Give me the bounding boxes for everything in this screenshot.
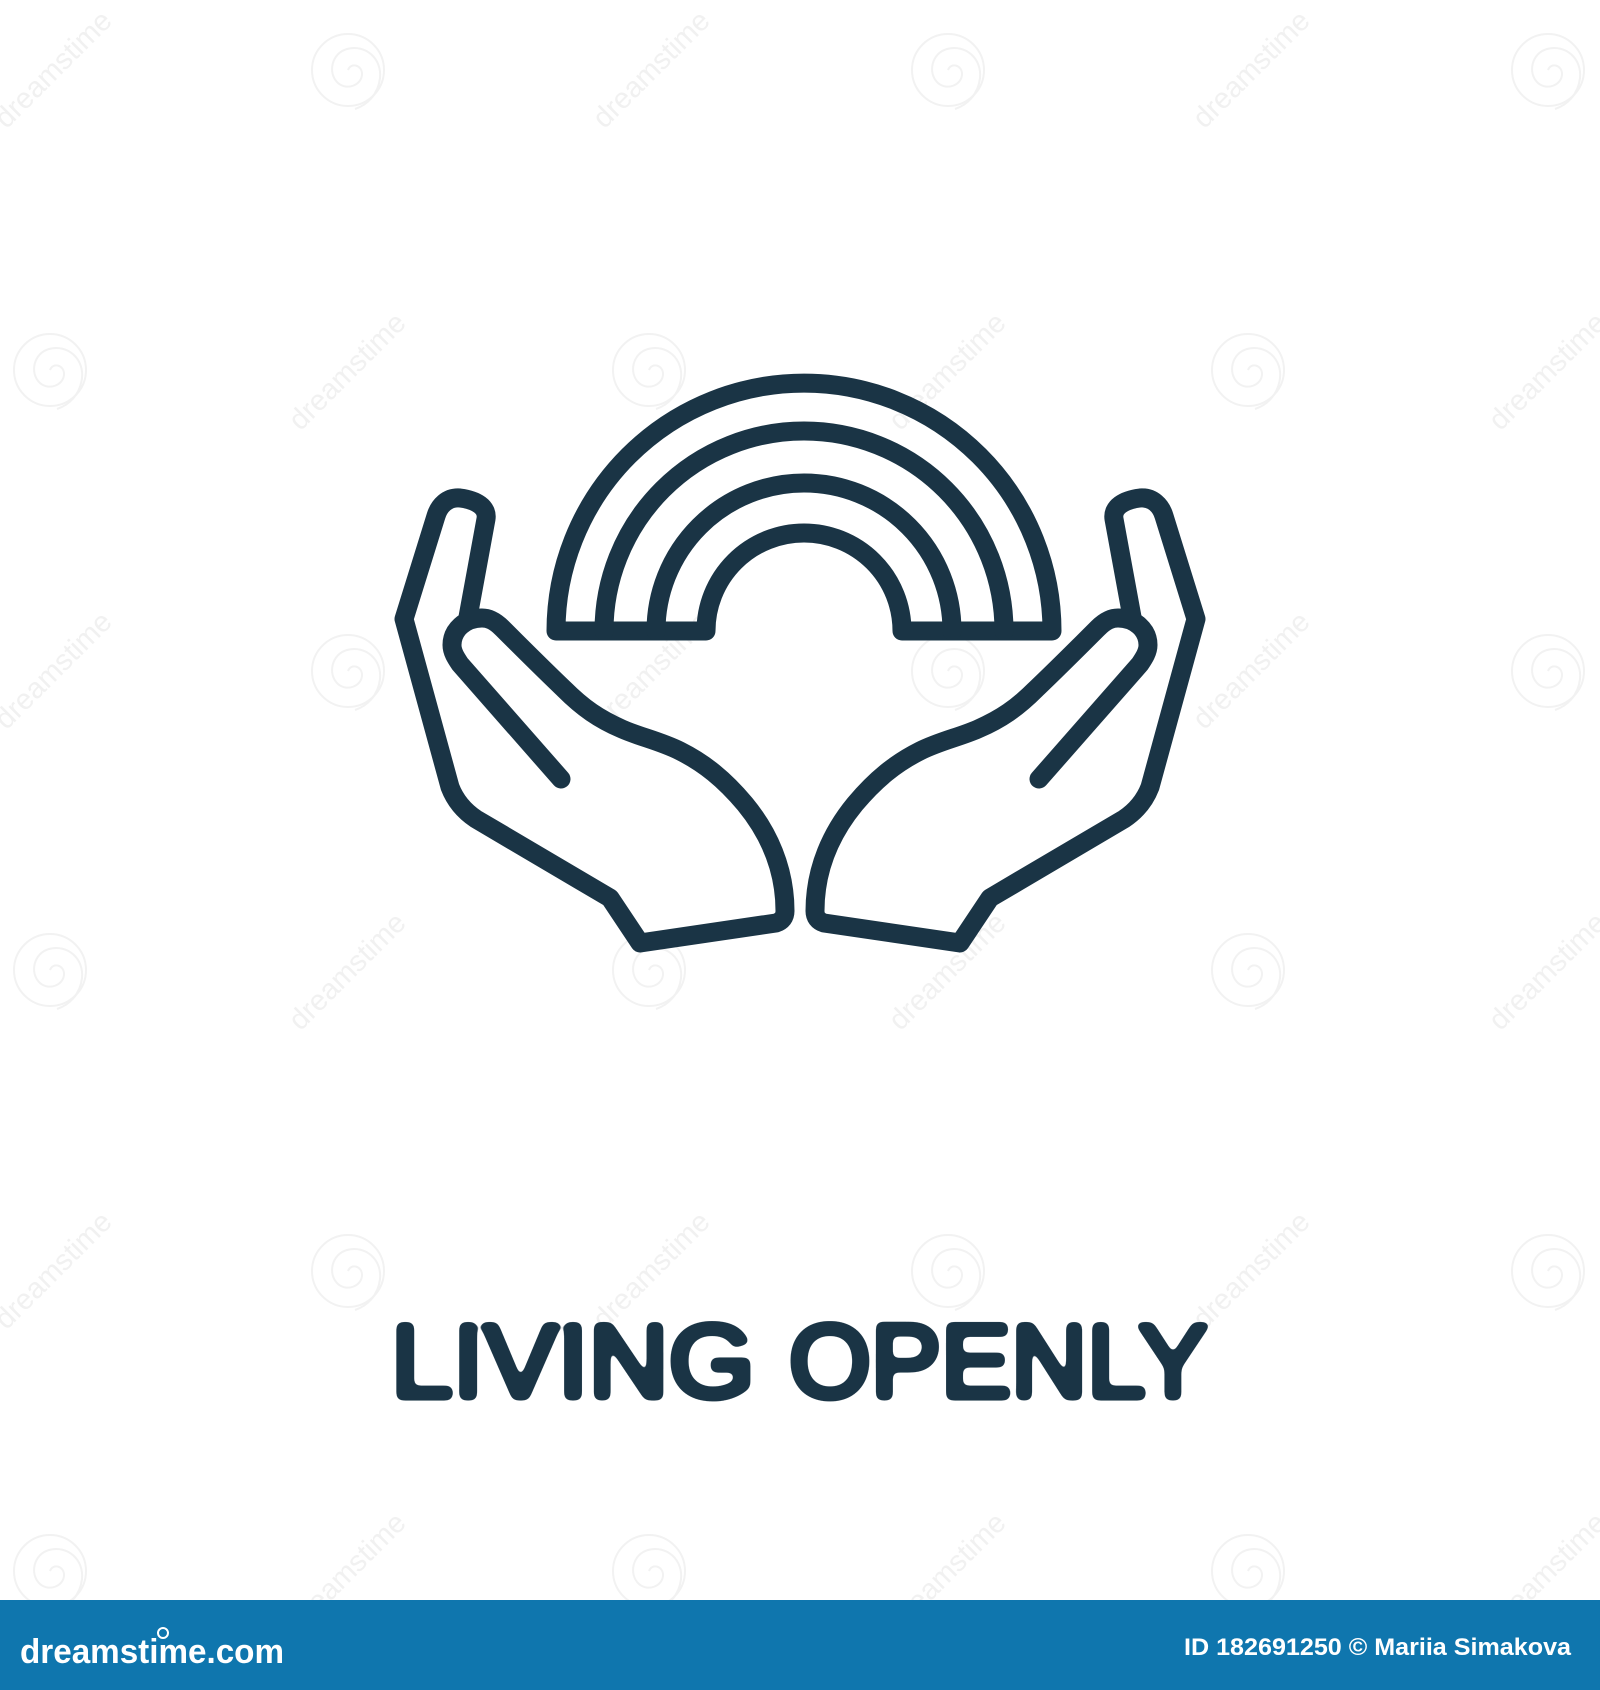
footer logo: dreamstime.com — [20, 1633, 284, 1671]
footer credit: ID 182691250 © Mariia Simakova — [1184, 1634, 1572, 1661]
watermark pattern: dreamstime — [883, 907, 1013, 1037]
icon: rainbow held by two hands — [404, 383, 1196, 943]
icon: left hand — [404, 498, 785, 943]
watermark pattern: dreamstime — [1187, 606, 1317, 736]
watermark pattern: dreamstime — [883, 307, 1013, 437]
watermark pattern: dreamstime — [1187, 5, 1317, 135]
watermark pattern: dreamstime — [283, 1507, 413, 1637]
watermark pattern: dreamstime — [587, 5, 717, 135]
title: OPENLY — [789, 1304, 1208, 1420]
watermark pattern: dreamstime — [283, 907, 413, 1037]
watermark pattern: dreamstime — [1187, 1206, 1317, 1336]
watermark pattern: dreamstime — [883, 1507, 1013, 1637]
icon: rainbow — [556, 383, 1052, 631]
watermark pattern: dreamstime — [587, 606, 717, 736]
watermark pattern: dreamstime — [587, 1206, 717, 1336]
footer band — [0, 1600, 1600, 1690]
title — [391, 1304, 1208, 1420]
watermark pattern: dreamstime — [283, 307, 413, 437]
title: LIVING — [391, 1304, 755, 1420]
icon: right hand — [815, 498, 1196, 943]
